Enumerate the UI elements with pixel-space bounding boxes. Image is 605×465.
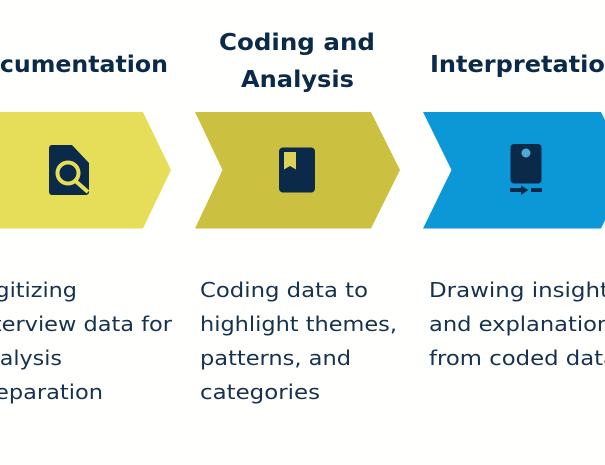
heading: coding and analysis: Analysis <box>241 67 354 93</box>
chevron: interpretation <box>423 112 605 228</box>
body text: coding and analysis: categories <box>200 380 320 404</box>
body text: interpretation <box>429 278 605 370</box>
heading: coding and analysis: Coding and <box>219 30 375 56</box>
panel: interpretation step <box>423 52 605 370</box>
chevron: documentation <box>0 112 171 228</box>
icon: document with magnifying glass <box>49 145 89 195</box>
body text: coding and analysis <box>200 278 397 404</box>
body text: coding and analysis: Coding data to <box>200 278 368 302</box>
body text: interpretation: from coded data <box>429 346 605 370</box>
body text: documentation <box>0 278 173 404</box>
body text: coding and analysis: highlight themes, <box>200 312 397 336</box>
panel: coding and analysis step <box>195 30 400 404</box>
icon: book with bookmark <box>279 148 315 192</box>
body text: interpretation: and explanations <box>429 312 605 336</box>
heading: coding and analysis <box>219 30 375 93</box>
body text: interpretation: Drawing insights <box>429 278 605 302</box>
body text: coding and analysis: patterns, and <box>200 346 351 370</box>
icon: device with arrow <box>510 144 542 195</box>
chevron: coding and analysis <box>195 112 400 228</box>
panel: documentation step <box>0 52 173 404</box>
